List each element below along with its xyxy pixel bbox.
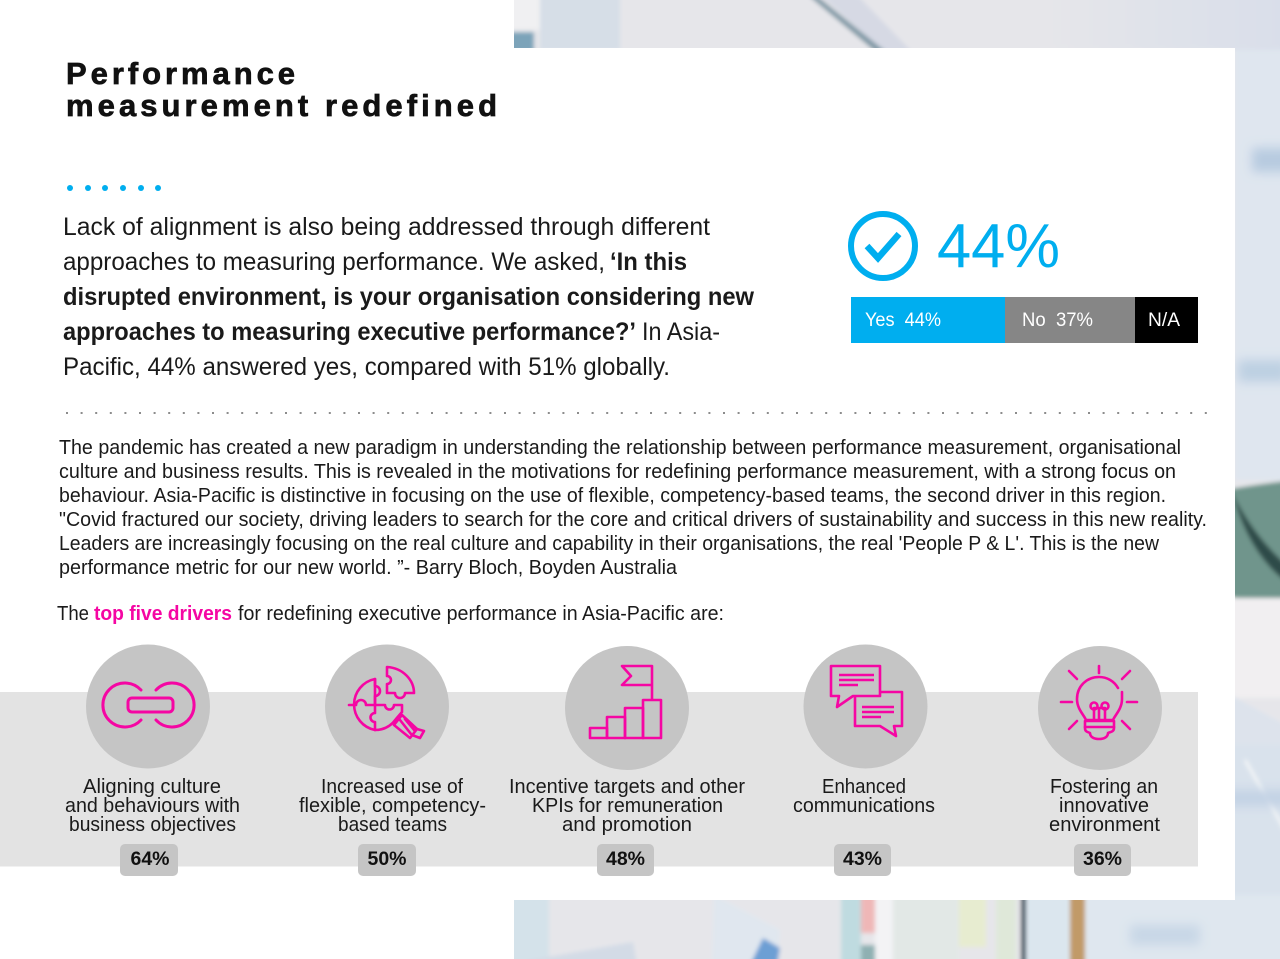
icon: steps and flag <box>590 666 661 738</box>
body text: The pandemic has created a new paradigm in understanding the relationship between performance measurement, organisational <box>59 437 1181 459</box>
stacked bar: yes no n/a: N/A <box>1148 309 1180 331</box>
driver 4: communications: communications <box>793 795 935 817</box>
driver 1: aligning culture: Aligning culture <box>83 776 221 798</box>
drivers heading: for redefining executive performance in Asia-Pacific are: <box>238 603 724 625</box>
driver 5: innovative environment: environment <box>1049 814 1160 836</box>
intro paragraph: disrupted environment, is your organisation considering new <box>63 283 755 311</box>
icon: check circle <box>851 214 915 278</box>
icon: light bulb <box>1061 666 1137 739</box>
title: Performance <box>66 56 295 91</box>
driver 3: incentive targets <box>509 646 745 876</box>
intro paragraph: Pacific, 44% answered yes, compared with 51% globally. <box>63 353 670 381</box>
decorative dots <box>67 185 161 191</box>
driver 5: innovative environment: 36% <box>1083 848 1122 870</box>
body text: performance metric for our new world. ”- Barry Bloch, Boyden Australia <box>59 557 678 579</box>
intro paragraph: approaches to measuring performance. We asked, <box>63 248 605 276</box>
grey band <box>0 692 1198 866</box>
stacked bar: yes no n/a: Yes 44% <box>865 309 941 331</box>
driver 2: flexible teams: 50% <box>367 848 407 870</box>
title: measurement redefined <box>66 88 497 123</box>
intro paragraph: ‘In this <box>610 248 687 276</box>
driver 5: innovative environment <box>1038 646 1162 876</box>
driver 1: aligning culture: 64% <box>130 848 170 870</box>
body text <box>59 437 1207 579</box>
driver 3: incentive targets: and promotion <box>562 814 692 836</box>
driver 3: incentive targets: Incentive targets and other <box>509 776 745 798</box>
driver 1: aligning culture <box>65 644 240 876</box>
driver 1: aligning culture: and behaviours with <box>65 795 240 817</box>
driver 3: incentive targets: 48% <box>606 848 645 870</box>
stacked bar: yes no n/a <box>851 297 1198 343</box>
intro paragraph: Lack of alignment is also being addressed through different <box>63 213 710 241</box>
body text: Leaders are increasingly focusing on the real culture and capability in their organisations, the real 'People P & L'. This is the new <box>59 533 1160 555</box>
body text: culture and business results. This is revealed in the motivations for redefining performance measurement, with a strong focus on <box>59 461 1176 483</box>
driver 3: incentive targets: KPIs for remuneration <box>532 795 723 817</box>
stacked bar: yes no n/a: No 37% <box>1022 309 1093 331</box>
driver 4: communications: Enhanced <box>822 776 906 798</box>
intro paragraph: In Asia- <box>642 318 720 346</box>
body text: "Covid fractured our society, driving leaders to search for the core and critical drivers of sustainability and success in this new reality. <box>59 509 1207 531</box>
driver 4: communications: 43% <box>843 848 882 870</box>
background photo <box>500 0 1280 959</box>
body text: behaviour. Asia-Pacific is distinctive in focusing on the use of flexible, competency-based teams, the second driver in this region. <box>59 485 1166 507</box>
driver 2: flexible teams <box>299 644 486 876</box>
driver 2: flexible teams: based teams <box>338 814 447 836</box>
intro paragraph <box>63 213 755 381</box>
drivers heading: top five drivers <box>94 603 232 625</box>
drivers heading: The <box>57 603 89 625</box>
icon: speech bubbles <box>831 666 902 736</box>
big stat 44%: 44% <box>937 212 1060 281</box>
driver 2: flexible teams: Increased use of <box>321 776 463 798</box>
driver 5: innovative environment: innovative <box>1059 795 1149 817</box>
icon: puzzle and magnifier <box>349 667 424 738</box>
icon: chain link <box>103 683 194 727</box>
driver 1: aligning culture: business objectives <box>69 814 236 836</box>
intro paragraph: approaches to measuring executive performance?’ <box>63 318 636 346</box>
driver 4: communications <box>793 644 935 876</box>
title <box>66 56 497 123</box>
driver 2: flexible teams: flexible, competency- <box>299 795 486 817</box>
driver 5: innovative environment: Fostering an <box>1050 776 1158 798</box>
